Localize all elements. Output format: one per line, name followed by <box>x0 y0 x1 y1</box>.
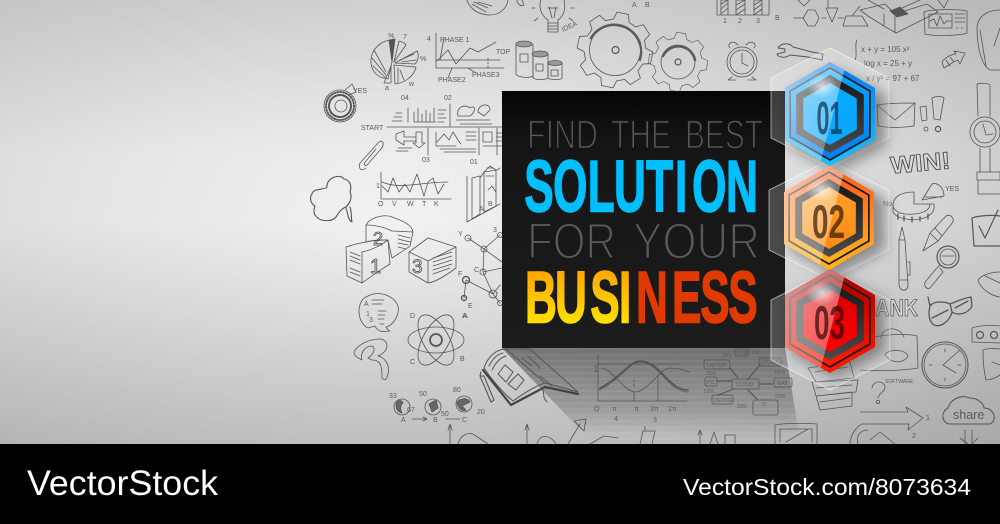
line: find the best: FIND <box>527 112 598 158</box>
doodle: bell curve chart <box>593 355 690 424</box>
line: find the best <box>527 112 763 158</box>
doodle: bell curve chart: O <box>594 406 600 413</box>
doodle: monitor <box>924 10 967 35</box>
doodle: percent circles: 50 <box>441 411 449 418</box>
doodle: network nodes: 3 <box>493 227 497 234</box>
doodle: flow shapes <box>794 0 868 26</box>
black title panel <box>502 91 785 348</box>
line: for your: FOR <box>527 212 616 270</box>
doodle: small gear <box>646 30 710 94</box>
doodles: top and right <box>467 0 1000 444</box>
doodle: percent circles: A <box>401 417 406 424</box>
doodle: speech bubble <box>359 294 398 331</box>
doodle: number cubes: 1 <box>370 256 381 278</box>
doodle: share cloud: share <box>953 408 984 422</box>
doodle: phase line chart: PHASE2 <box>438 77 466 84</box>
doodle: top bar chart: 3 <box>756 18 760 25</box>
doodle: pie chart: w <box>408 81 415 88</box>
doodle: equations <box>855 40 920 83</box>
doodle: pie chart: a <box>385 85 389 92</box>
doodle: share cloud <box>943 397 994 444</box>
doodle: angled pencil <box>923 215 953 251</box>
doodle: waveform line chart: O <box>378 201 384 208</box>
doodle: magnifier <box>925 246 959 288</box>
doodle: phase line chart: 4 <box>427 36 431 43</box>
doodle: right arrow: 2 <box>912 433 916 440</box>
doodle: cloud network diagram: 25% <box>706 371 717 377</box>
doodle: wrench <box>777 44 823 60</box>
doodle: cloud network diagram: 25% <box>775 394 786 400</box>
doodle: wall clock <box>922 342 968 388</box>
doodle: data cans <box>516 41 562 80</box>
doodle: light bulb <box>517 0 650 34</box>
doodle: wrist watch <box>970 83 1000 194</box>
doodle: speech bubble: 3 <box>369 317 373 324</box>
line: solution: SOLUTION <box>524 145 758 227</box>
doodle: bell curve chart: 1 <box>593 364 599 375</box>
doodle: bell curve chart: π <box>634 406 639 413</box>
doodle: pie chart: % <box>388 33 394 40</box>
doodle: lower monitor <box>775 423 817 444</box>
doodle: waveform line chart: W <box>407 201 414 208</box>
doodle: letter B <box>983 349 1000 380</box>
doodle: atom: B <box>460 356 465 363</box>
doodle: start timeline infographic <box>361 95 510 166</box>
doodle: glasses <box>928 297 972 326</box>
doodle: speech bubble: A <box>364 301 369 308</box>
doodle: start timeline infographic: 03 <box>422 157 430 164</box>
doodle: pie chart: 7 <box>403 34 407 41</box>
doodle: question mark: SOFTWARE <box>885 379 914 385</box>
doodle: percent circles: 67 <box>407 407 415 414</box>
doodle: book stack <box>808 362 858 410</box>
doodle: question mark <box>872 379 914 404</box>
doodle: network nodes: F <box>458 271 462 278</box>
doodle: light bulb: A <box>632 2 637 9</box>
doodle: alarm clock <box>727 42 757 80</box>
doodle: atom <box>408 309 468 371</box>
doodle: bell curve chart: 3 <box>653 417 657 424</box>
doodle: top dial <box>467 0 508 15</box>
number 02: 02 <box>812 195 845 248</box>
doodle: equations: x + y = 105 x² <box>861 45 910 54</box>
doodle: waveform line chart: K <box>434 201 439 208</box>
doodle: waveform line chart: V <box>392 201 397 208</box>
doodle: start timeline infographic: START <box>361 125 384 132</box>
doodle: phase line chart: TOP <box>496 49 511 56</box>
line: for your <box>527 212 760 270</box>
line: for your: YOUR <box>633 212 760 270</box>
doodle: phase line chart: PHASE3 <box>472 72 500 79</box>
doodle: cloud network diagram: 8% <box>752 350 760 356</box>
doodle: bank text: BANK <box>861 295 919 322</box>
doodle: network nodes: C <box>474 267 479 274</box>
long shadow under panel <box>502 348 800 440</box>
doodle: network nodes: E <box>468 303 473 310</box>
doodle: 3D bars: A <box>479 206 484 213</box>
doodle: pen <box>480 372 494 402</box>
doodle: coin pie: No <box>883 201 892 208</box>
doodle: atom: A <box>463 313 468 320</box>
doodle: small glasses tag <box>972 325 1000 343</box>
doodle: top bar chart: 2 <box>738 18 742 25</box>
doodle: equations: log x = 25 + y <box>864 59 912 68</box>
doodle: cloud network diagram: STORAGE <box>761 360 786 366</box>
doodle: number cubes: 3 <box>412 257 423 278</box>
doodle: top bar chart: 1 <box>723 18 727 25</box>
doodle: percent circles: 80 <box>453 387 461 394</box>
watermark footer bar <box>0 444 1000 524</box>
doodle: mouse <box>978 272 1000 297</box>
doodle: edge device <box>977 10 1000 70</box>
doodle: bell curve chart: 4 <box>614 416 618 423</box>
doodle: open book <box>483 349 578 405</box>
doodle: cloud network diagram: 20% <box>722 353 733 359</box>
doodle: coin pie <box>883 184 959 222</box>
doodle: thought cloud <box>311 176 352 222</box>
doodles: left cluster <box>311 33 586 444</box>
doodle: percent circles: 50 <box>419 391 427 398</box>
doodle: right arrow: 1 <box>926 415 930 422</box>
doodle: coin pie: YES <box>945 186 959 193</box>
line: business yellow part: BUSI <box>525 256 631 338</box>
image url: VectorStock.com/8073634 <box>683 474 971 500</box>
number 01: 01 <box>816 92 843 144</box>
doodle: envelope <box>877 103 915 128</box>
doodle: cloud network diagram: USB <box>737 351 748 357</box>
doodle: cloud network diagram: DEVICE <box>714 398 733 404</box>
doodle: cloud network diagram: IT <box>762 402 766 408</box>
doodle: spiral target: YES <box>353 88 367 95</box>
doodle: start timeline infographic: 02 <box>444 95 452 102</box>
badge 02 <box>784 166 874 270</box>
doodle: 3D bars: B <box>488 201 493 208</box>
doodle: cloud network diagram: PC <box>707 380 714 386</box>
line: find the best: THE <box>611 112 671 158</box>
doodle: parcel box <box>860 0 948 33</box>
doodle: bell curve chart: π <box>612 406 617 413</box>
doodle: check box <box>972 210 1000 246</box>
doodle: percent circles: B <box>433 417 438 424</box>
doodle: cloud network diagram: 51% <box>704 389 715 395</box>
doodle: start timeline infographic: 01 <box>470 159 478 166</box>
doodle: network nodes <box>458 227 502 320</box>
doodle: lower icons <box>590 426 735 444</box>
doodle: large gear <box>571 6 659 94</box>
doodle: start timeline infographic: 04 <box>401 95 409 102</box>
doodle: percent circles: 20 <box>477 409 485 416</box>
badge shadows <box>790 70 885 378</box>
doodle: network nodes: A <box>462 313 467 320</box>
line: find the best: BEST <box>685 112 763 158</box>
badge 01 <box>785 62 875 166</box>
doodle: percent circles: C <box>462 417 467 424</box>
doodle: atom: D <box>410 313 415 320</box>
doodle: curved arrow <box>942 51 965 68</box>
doodle: vertical pencil <box>899 227 910 290</box>
doodle: number cubes: 2 <box>373 229 383 249</box>
doodle: pie chart: % <box>420 56 426 63</box>
doodle: waveform line chart: T <box>422 201 427 208</box>
doodle: atom: C <box>410 359 415 366</box>
doodle: cloud network diagram: LAPTOP <box>707 363 727 369</box>
headline <box>524 112 763 338</box>
doodle: equations: x / y² = 97 + 67 <box>866 74 920 83</box>
doodle: pie chart <box>371 33 426 92</box>
brand name: VectorStock <box>27 464 219 503</box>
doodle: light bulb: B <box>645 2 650 9</box>
doodle: percent circles <box>389 387 485 424</box>
doodle: cloud network diagram: MAIL <box>777 381 789 387</box>
glass hexagon backs <box>769 48 890 390</box>
doodle: network nodes: Y <box>458 231 463 238</box>
doodle: light bulb: IDEA <box>561 20 579 34</box>
doodle: top bar chart <box>717 0 780 25</box>
doodle: cloud network diagram <box>704 349 792 415</box>
doodle: percent circles: 33 <box>389 393 397 400</box>
doodle: phase line chart: PHASE 1 <box>440 37 470 44</box>
doodle: waveform line chart <box>376 172 451 208</box>
doodle: lower arrows <box>448 419 586 444</box>
doodle: cloud network diagram: 31% <box>737 404 748 410</box>
doodle: 3D bars <box>467 166 500 222</box>
doodle: right arrow <box>850 407 930 444</box>
doodle: speech bubble: 1 <box>366 311 370 318</box>
doodle: top bar chart: B <box>775 15 780 22</box>
doodle: WIN text: WIN! <box>889 147 951 180</box>
doodle: cloud network diagram: 66% <box>775 370 786 376</box>
hexagon badges <box>769 48 890 390</box>
doodle: number cubes <box>346 216 456 283</box>
doodle: paper clip <box>359 141 383 170</box>
doodle: spiral target <box>324 84 367 122</box>
doodle: bell curve chart: 3π <box>650 406 659 413</box>
doodle: briefcase <box>860 329 918 371</box>
badge 03 <box>785 269 875 373</box>
number 03: 03 <box>814 296 845 349</box>
line: business red part: NESS <box>636 256 758 338</box>
doodle: big number three <box>354 339 389 380</box>
doodle: waveform line chart: 1 <box>376 183 380 190</box>
doodle: cloud network diagram: CLOUD <box>736 382 754 388</box>
doodle: exclamation marks <box>920 96 944 132</box>
doodle: bell curve chart: 2π <box>668 406 677 413</box>
doodle: phase line chart <box>427 33 511 84</box>
